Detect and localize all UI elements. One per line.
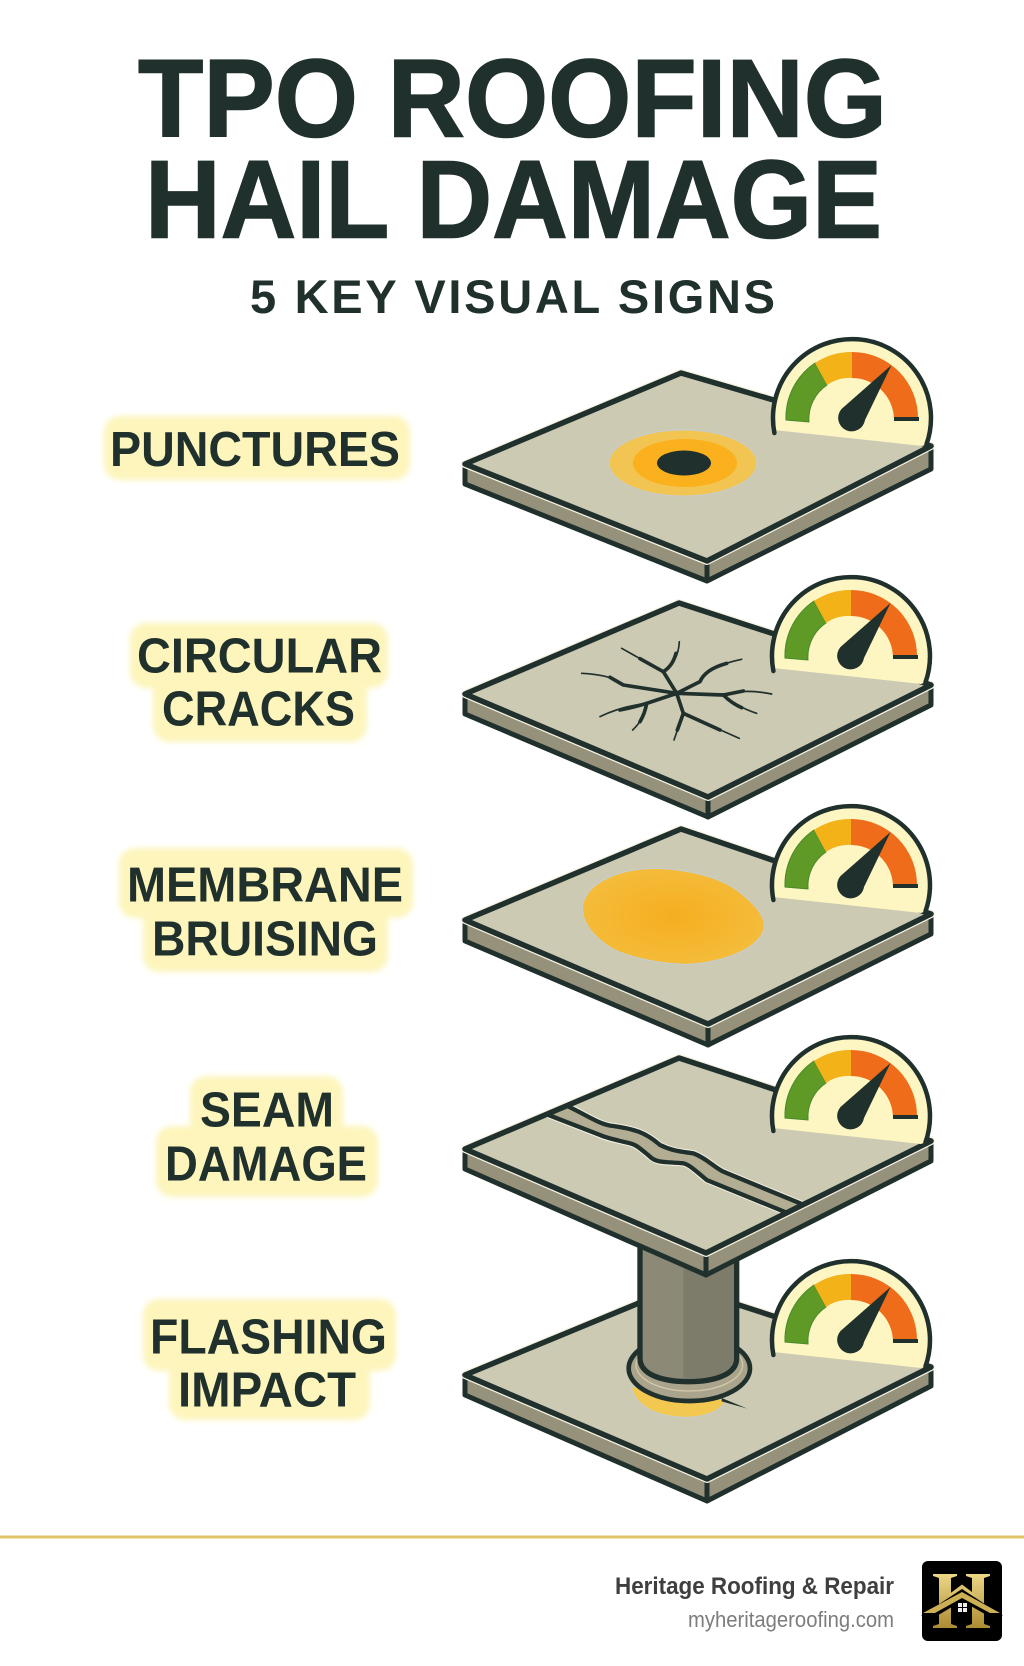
panel: seam damage slab — [465, 1037, 931, 1275]
label: seam damage: SEAM — [200, 1084, 334, 1138]
title line 1: TPO ROOFING — [138, 38, 887, 160]
gauge — [772, 806, 930, 913]
label: flashing impact: FLASHING — [150, 1310, 387, 1364]
pipe and flashing collar — [629, 1240, 750, 1417]
panel: circular cracks slab — [465, 577, 931, 817]
collar inner ring — [636, 1339, 743, 1391]
wavy seam — [547, 1106, 803, 1213]
label: membrane bruising — [119, 848, 413, 972]
label: flashing impact: IMPACT — [178, 1364, 356, 1418]
panel: membrane bruising slab — [465, 806, 931, 1045]
label: membrane bruising: MEMBRANE — [127, 858, 403, 912]
collar — [629, 1336, 750, 1401]
title line 2: HAIL DAMAGE — [145, 138, 882, 262]
panel: punctures slab — [465, 339, 931, 581]
footer: website: myheritageroofing.com — [688, 1607, 894, 1632]
crack — [722, 1398, 747, 1409]
pipe — [640, 1240, 737, 1382]
crack lines — [582, 642, 772, 740]
footer: company name: Heritage Roofing & Repair — [615, 1573, 894, 1600]
gauge — [772, 1037, 930, 1144]
gauge — [773, 339, 931, 446]
label: seam damage — [156, 1076, 378, 1197]
footer divider — [0, 1536, 1024, 1538]
gauge — [772, 1261, 930, 1368]
panel: flashing impact slab — [465, 1240, 931, 1501]
label: circular cracks — [130, 623, 388, 742]
subtitle: 5 KEY VISUAL SIGNS — [250, 270, 775, 323]
title — [138, 38, 887, 262]
label: punctures: PUNCTURES — [110, 423, 400, 477]
bruise blotch — [582, 868, 764, 964]
yellow impact patch — [631, 1387, 727, 1417]
label: membrane bruising: BRUISING — [152, 912, 378, 966]
gauge — [772, 577, 930, 684]
logo — [921, 1561, 1003, 1641]
label: circular cracks: CIRCULAR — [137, 630, 382, 684]
label: flashing impact — [143, 1299, 396, 1420]
label: seam damage: DAMAGE — [165, 1138, 367, 1192]
puncture mark — [609, 430, 757, 496]
label: circular cracks: CRACKS — [162, 682, 355, 736]
